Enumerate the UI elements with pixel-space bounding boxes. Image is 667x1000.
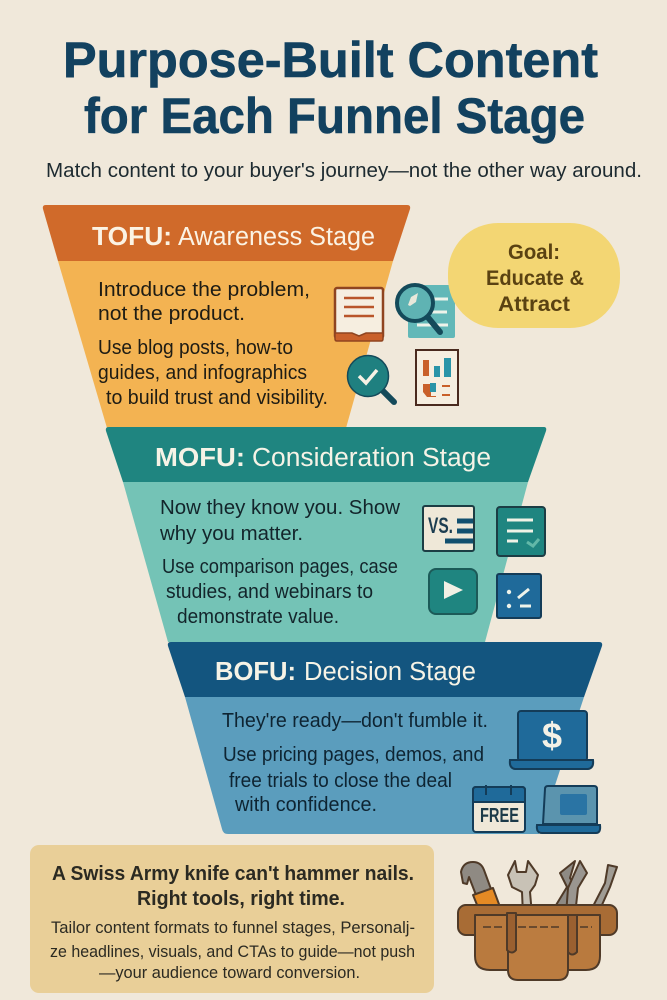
subtitle: Match content to your buyer's journey—not the other way around. xyxy=(46,159,642,182)
MOFU text block: Use comparison pages, case xyxy=(162,556,398,578)
BOFU funnel body xyxy=(185,697,584,834)
icon: small laptop xyxy=(537,786,600,833)
TOFU text block: Introduce the problem, xyxy=(98,279,310,301)
icon: blue chart square xyxy=(497,574,541,618)
icon: checklist xyxy=(497,507,545,556)
takeaway text: —your audience toward conversion. xyxy=(99,963,360,982)
MOFU heading: MOFU: xyxy=(155,444,245,472)
icon: free calendar xyxy=(473,785,525,832)
TOFU heading xyxy=(92,223,375,251)
belt xyxy=(458,905,617,935)
TOFU heading: Awareness Stage xyxy=(178,223,375,251)
BOFU heading: Decision Stage xyxy=(304,658,476,686)
pliers xyxy=(550,861,577,915)
icon: magnifier over document xyxy=(397,285,455,338)
right pocket xyxy=(565,915,600,970)
BOFU heading xyxy=(215,658,476,686)
wrench xyxy=(508,861,538,915)
straps xyxy=(507,913,577,954)
BOFU text block: free trials to close the deal xyxy=(229,770,452,792)
icon: video play xyxy=(429,569,477,614)
TOFU heading: TOFU: xyxy=(92,223,172,251)
icon: VS comparison: VS. xyxy=(428,513,453,538)
icon: free calendar: FREE xyxy=(480,804,519,827)
callout: goal: Educate & xyxy=(486,267,584,290)
takeaway text: Tailor content formats to funnel stages, Personalj- xyxy=(51,918,415,937)
takeaway heading: A Swiss Army knife can't hammer nails. xyxy=(52,863,414,885)
BOFU header band xyxy=(168,642,602,697)
icon: chart report xyxy=(416,350,458,405)
BOFU text block: They're ready—don't fumble it. xyxy=(222,710,488,732)
panel: TOFU xyxy=(43,205,410,428)
centre pocket xyxy=(508,915,568,980)
MOFU heading: Consideration Stage xyxy=(252,444,491,472)
MOFU text block: demonstrate value. xyxy=(177,606,339,628)
takeaway text: ze headlines, visuals, and CTAs to guide—not push xyxy=(50,942,415,961)
TOFU header band xyxy=(43,205,410,261)
takeaway heading xyxy=(52,863,414,910)
icon: pricing laptop xyxy=(510,711,593,769)
MOFU text block: Now they know you. Show xyxy=(160,497,401,519)
callout: goal xyxy=(448,223,620,328)
BOFU text block: Use pricing pages, demos, and xyxy=(223,744,484,766)
TOFU text block xyxy=(98,279,328,409)
TOFU text block: not the product. xyxy=(98,303,245,325)
BOFU text block xyxy=(222,710,488,816)
TOFU text block: to build trust and visibility. xyxy=(106,387,328,409)
takeaway heading: Right tools, right time. xyxy=(137,888,345,910)
MOFU funnel body xyxy=(123,482,528,642)
MOFU header band xyxy=(106,427,546,482)
screwdriver xyxy=(588,865,617,916)
icon: tool belt xyxy=(458,861,617,980)
title: Purpose-Built Content xyxy=(63,32,598,88)
hook tool xyxy=(461,862,491,895)
callout: goal: Attract xyxy=(498,293,570,316)
icon: VS comparison xyxy=(423,506,474,551)
BOFU text block: with confidence. xyxy=(234,794,377,816)
icon: pricing laptop: $ xyxy=(542,715,562,756)
MOFU heading xyxy=(155,444,491,472)
title xyxy=(63,32,598,144)
left pocket xyxy=(475,915,510,970)
callout: goal: Goal: xyxy=(508,241,560,264)
BOFU heading: BOFU: xyxy=(215,658,296,686)
icon: open book xyxy=(335,288,383,341)
title: for Each Funnel Stage xyxy=(84,88,585,144)
panel: takeaway xyxy=(30,845,434,993)
icon: check magnifier xyxy=(348,356,394,402)
TOFU text block: guides, and infographics xyxy=(98,362,307,384)
panel: BOFU xyxy=(168,642,602,834)
MOFU text block: why you matter. xyxy=(159,523,303,545)
takeaway text xyxy=(50,918,415,982)
TOFU text block: Use blog posts, how-to xyxy=(98,337,293,359)
TOFU funnel body xyxy=(58,261,393,428)
MOFU text block xyxy=(159,497,401,628)
MOFU text block: studies, and webinars to xyxy=(166,581,373,603)
panel: MOFU xyxy=(106,427,546,642)
